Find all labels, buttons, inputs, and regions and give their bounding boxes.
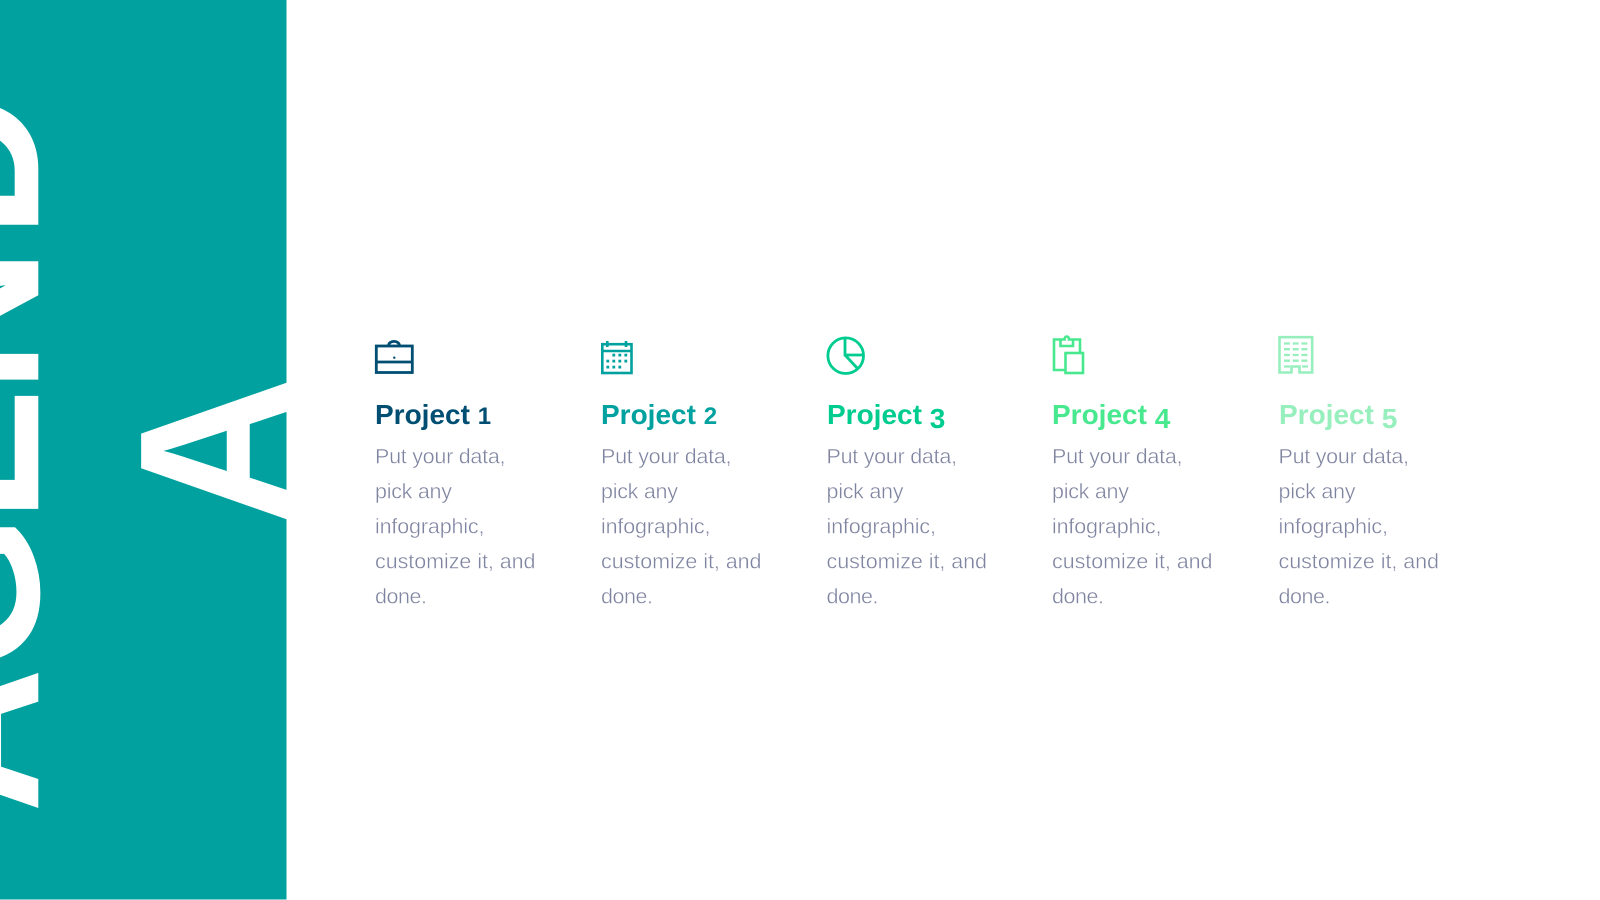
- heading: project 5: Project: [1279, 399, 1374, 430]
- text: project 3 description: infographic,: [826, 514, 936, 538]
- text: project 2 description: customize it, and: [601, 550, 762, 574]
- text: project 2 description: [601, 444, 762, 608]
- text: project 5 description: Put your data,: [1278, 444, 1409, 468]
- text: project 4 description: Put your data,: [1052, 444, 1182, 468]
- text: project 2 description: pick any: [601, 480, 678, 504]
- text: project 4 description: done.: [1052, 584, 1104, 608]
- text: project 1 description: pick any: [375, 480, 452, 504]
- panel: left teal sidebar: [0, 0, 286, 900]
- title: AGENDA rotated: [0, 108, 286, 808]
- heading: project 3: Project: [827, 399, 922, 430]
- text: project 5 description: infographic,: [1278, 514, 1388, 538]
- text: project 2 description: done.: [601, 584, 653, 608]
- column: project 3: [826, 338, 987, 608]
- text: project 5 description: [1278, 444, 1439, 608]
- text: project 3 description: pick any: [826, 480, 904, 504]
- text: project 3 description: Put your data,: [826, 444, 957, 468]
- column: project 5: [1278, 337, 1439, 608]
- text: project 5 description: done.: [1278, 584, 1330, 608]
- column: project 2: [601, 341, 762, 608]
- text: project 1 description: done.: [375, 584, 427, 608]
- heading: project 5: 5: [1382, 403, 1397, 434]
- text: project 4 description: [1052, 444, 1212, 608]
- heading: project 4: Project: [1052, 399, 1147, 430]
- text: project 3 description: customize it, and: [826, 550, 987, 574]
- heading: project 1: Project 1: [375, 399, 491, 430]
- title: AGENDA rotated: A: [96, 377, 333, 524]
- text: project 4 description: pick any: [1052, 480, 1129, 504]
- column: project 1: [375, 341, 536, 608]
- heading: project 4: 4: [1155, 403, 1171, 434]
- text: project 1 description: [375, 444, 536, 608]
- icon: calendar: [602, 341, 632, 373]
- text: project 2 description: infographic,: [601, 514, 710, 538]
- heading: project 3: 3: [930, 403, 945, 434]
- icon: pie chart: [828, 338, 864, 374]
- text: project 4 description: customize it, and: [1052, 550, 1212, 574]
- icon: clipboard: [1054, 336, 1083, 373]
- icon: briefcase: [376, 341, 412, 372]
- text: project 1 description: customize it, and: [375, 550, 536, 574]
- text: project 3 description: [826, 444, 987, 608]
- text: project 1 description: Put your data,: [375, 444, 506, 468]
- text: project 3 description: done.: [826, 584, 878, 608]
- text: project 2 description: Put your data,: [601, 444, 732, 468]
- text: project 5 description: pick any: [1278, 480, 1356, 504]
- text: project 5 description: customize it, and: [1278, 550, 1439, 574]
- text: project 1 description: infographic,: [375, 514, 484, 538]
- text: project 4 description: infographic,: [1052, 514, 1162, 538]
- heading: project 2: Project 2: [601, 399, 717, 430]
- column: project 4: [1052, 336, 1212, 608]
- icon: office building: [1280, 337, 1312, 372]
